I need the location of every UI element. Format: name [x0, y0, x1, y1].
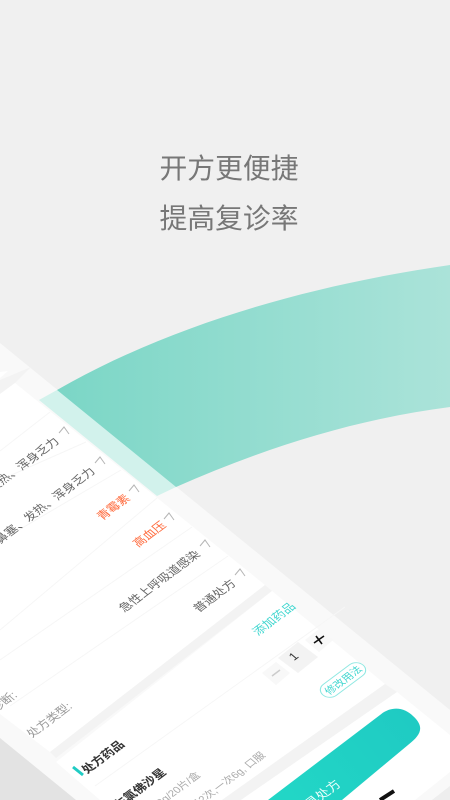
top card [0, 371, 8, 378]
button card [241, 692, 450, 800]
row labels [0, 688, 75, 740]
row values: 普通处方 [189, 576, 239, 615]
section accent bar [73, 767, 83, 775]
phone mockup [0, 265, 450, 800]
lower separator [222, 684, 397, 800]
separator strip [0, 367, 31, 394]
edit usage button [316, 660, 370, 700]
row chevrons [59, 427, 245, 576]
phone bottom corner [432, 786, 450, 800]
row values: 高血压 [129, 518, 169, 550]
row values: 急性上呼吸道感染 [115, 547, 203, 614]
section heading: 处方药品 [78, 738, 128, 776]
card separator [50, 585, 272, 758]
stepper [262, 629, 333, 685]
teal curved band [57, 265, 450, 487]
add medicine link: 添加药品 [250, 600, 299, 638]
medicine card [56, 591, 385, 800]
phone side shadow [0, 738, 76, 800]
row dividers [0, 412, 345, 786]
title: 提高复诊率 [160, 203, 298, 234]
row values: 青霉素 [94, 492, 133, 523]
stepper: 1 [286, 650, 302, 663]
edit usage button: 修改用法 [322, 664, 365, 697]
phone frame [0, 343, 450, 800]
home indicator [380, 791, 394, 800]
prescribe button [268, 709, 420, 800]
main card [0, 383, 265, 752]
row values [0, 434, 239, 615]
light teal edge [39, 390, 176, 496]
title: 开方更便捷 [160, 153, 298, 184]
row labels: 处方类型: [23, 700, 75, 740]
title [160, 153, 298, 234]
